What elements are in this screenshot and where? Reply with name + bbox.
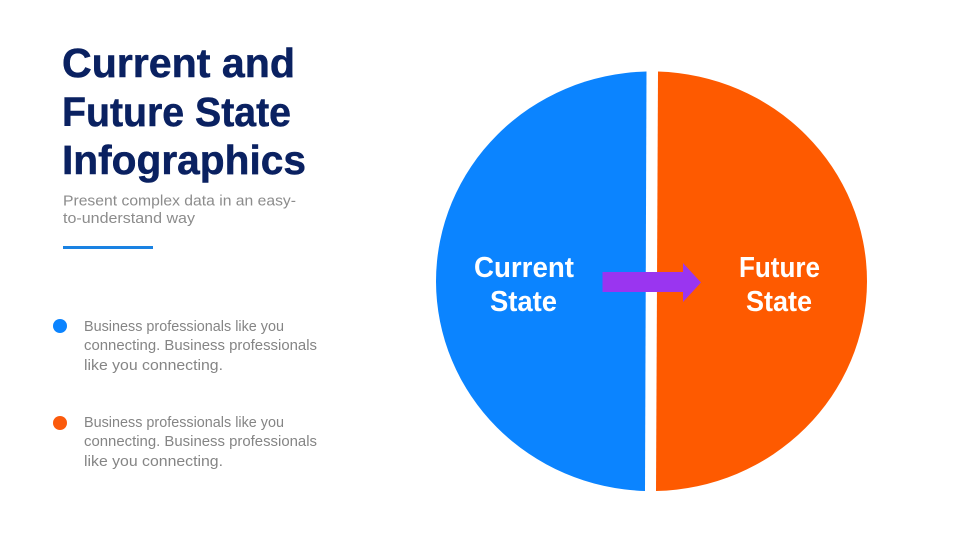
- text: future state description: [84, 415, 317, 470]
- icon: blue dot: [53, 319, 67, 333]
- text: future state description: like you connecting.: [84, 454, 223, 470]
- label: future state: Future: [739, 252, 820, 284]
- segment: current state: [436, 72, 646, 491]
- subtitle: Present complex data in an easy-: [63, 194, 296, 210]
- segment: future state: [656, 72, 867, 491]
- label: current state: Current: [474, 252, 574, 284]
- text: current state description: like you connecting.: [84, 358, 223, 374]
- label: future state: State: [746, 286, 812, 318]
- title: [62, 40, 306, 183]
- text: future state description: connecting. Business professionals: [84, 434, 317, 450]
- pie chart: [436, 72, 867, 491]
- accent rule: [63, 246, 153, 249]
- title: Future State: [62, 89, 291, 135]
- text: current state description: connecting. Business professionals: [84, 338, 317, 354]
- text: current state description: [84, 319, 317, 374]
- label: current state: [474, 252, 574, 318]
- title: Current and: [62, 40, 295, 86]
- legend item: current state: [53, 319, 317, 374]
- title: Infographics: [62, 137, 306, 183]
- label: current state: State: [490, 286, 557, 318]
- subtitle: [63, 194, 296, 227]
- label: future state: [739, 252, 820, 318]
- subtitle: to-understand way: [63, 211, 196, 227]
- legend item: future state: [53, 415, 317, 470]
- text: future state description: Business professionals like you: [84, 415, 284, 431]
- arrow: [602, 263, 701, 302]
- icon: orange dot: [53, 416, 67, 430]
- text: current state description: Business professionals like you: [84, 319, 284, 335]
